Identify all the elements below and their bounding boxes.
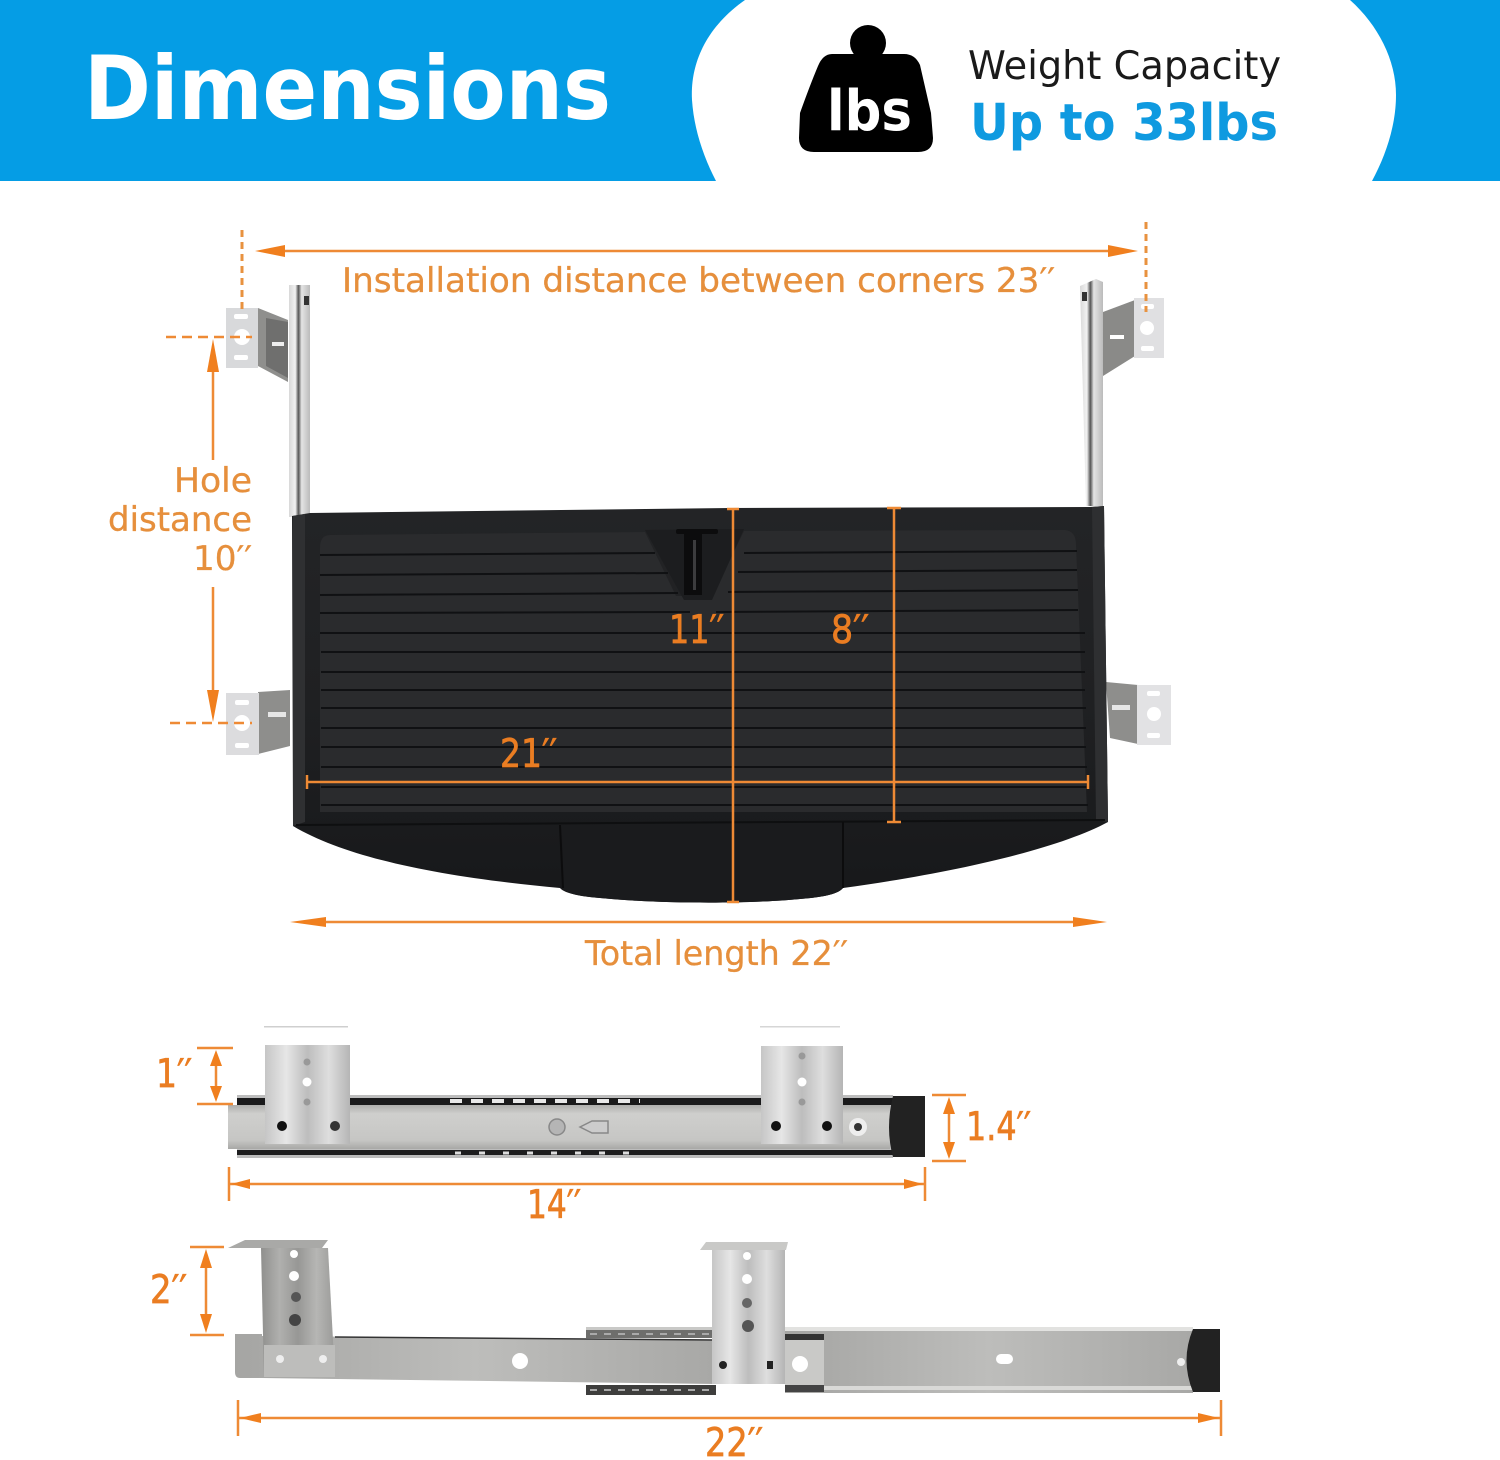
dimension: tray depth 8 — [831, 507, 901, 822]
weight capacity value: Up to 33lbs — [970, 94, 1278, 153]
upper right bracket — [1103, 298, 1164, 376]
rail bracket right — [760, 1026, 843, 1144]
upper left bracket — [226, 308, 288, 382]
tray latch — [645, 529, 744, 600]
title: Dimensions — [84, 37, 611, 140]
outer rail end cap — [1186, 1329, 1220, 1392]
dimension: total length: Total length 22′′ — [584, 934, 848, 974]
dimension: total length — [290, 917, 1107, 974]
white capacity panel — [692, 0, 1396, 181]
rail body — [228, 1095, 893, 1158]
dimension: bracket height 1: 1′′ — [156, 1052, 192, 1097]
dimension: hole distance — [108, 337, 252, 723]
dimension: bracket height 2 — [150, 1247, 224, 1335]
dimension: installation distance — [242, 222, 1146, 312]
right slide arm — [1080, 279, 1103, 506]
dimension: hole distance: Hole — [174, 461, 252, 501]
tray ribs — [320, 551, 1088, 805]
slide rail closed — [228, 1026, 925, 1158]
dimension: tray depth 11 — [669, 508, 739, 902]
rail bracket left — [264, 1026, 350, 1144]
icon: lbs weight: lbs — [827, 79, 912, 144]
tray body — [292, 506, 1108, 903]
dimension: rail length 14: 14′′ — [527, 1183, 581, 1228]
lower right bracket — [1106, 682, 1171, 745]
bracket one — [228, 1240, 335, 1377]
dimension: installation distance: Installation distance between corners 23′′ — [342, 261, 1055, 301]
lower left bracket — [226, 690, 290, 755]
dimension: rail height 1.4: 1.4′′ — [966, 1105, 1031, 1150]
inner rail bar — [235, 1334, 715, 1384]
dimension: tray width 21: 21′′ — [500, 732, 557, 777]
dimension: rail length 14 — [229, 1167, 925, 1228]
weight capacity label: Weight Capacity — [968, 44, 1281, 89]
keyboard tray assembly — [226, 279, 1171, 903]
inner rail hole — [512, 1353, 528, 1369]
dimension: tray depth 8: 8′′ — [831, 608, 869, 653]
bracket two — [700, 1242, 788, 1384]
dimension: rail height 1.4 — [932, 1095, 1031, 1161]
dimension: hole distance: distance — [108, 500, 252, 540]
rail end cap — [889, 1096, 925, 1157]
inner rail top edge — [335, 1337, 715, 1340]
icon: lbs weight — [799, 25, 933, 152]
dimension: hole distance: 10′′ — [193, 539, 252, 579]
dimension: extended length 22 — [238, 1400, 1221, 1460]
outer rail bar — [785, 1327, 1194, 1393]
dimension: bracket height 2: 2′′ — [150, 1268, 187, 1313]
left slide arm — [289, 285, 310, 517]
dimension: tray depth 11: 11′′ — [669, 608, 724, 653]
dimension: tray width 21 — [307, 732, 1088, 789]
header banner — [0, 0, 1500, 181]
dimension: bracket height 1 — [156, 1048, 233, 1104]
inner rail strips — [586, 1327, 716, 1395]
slide rail extended — [228, 1240, 1220, 1395]
